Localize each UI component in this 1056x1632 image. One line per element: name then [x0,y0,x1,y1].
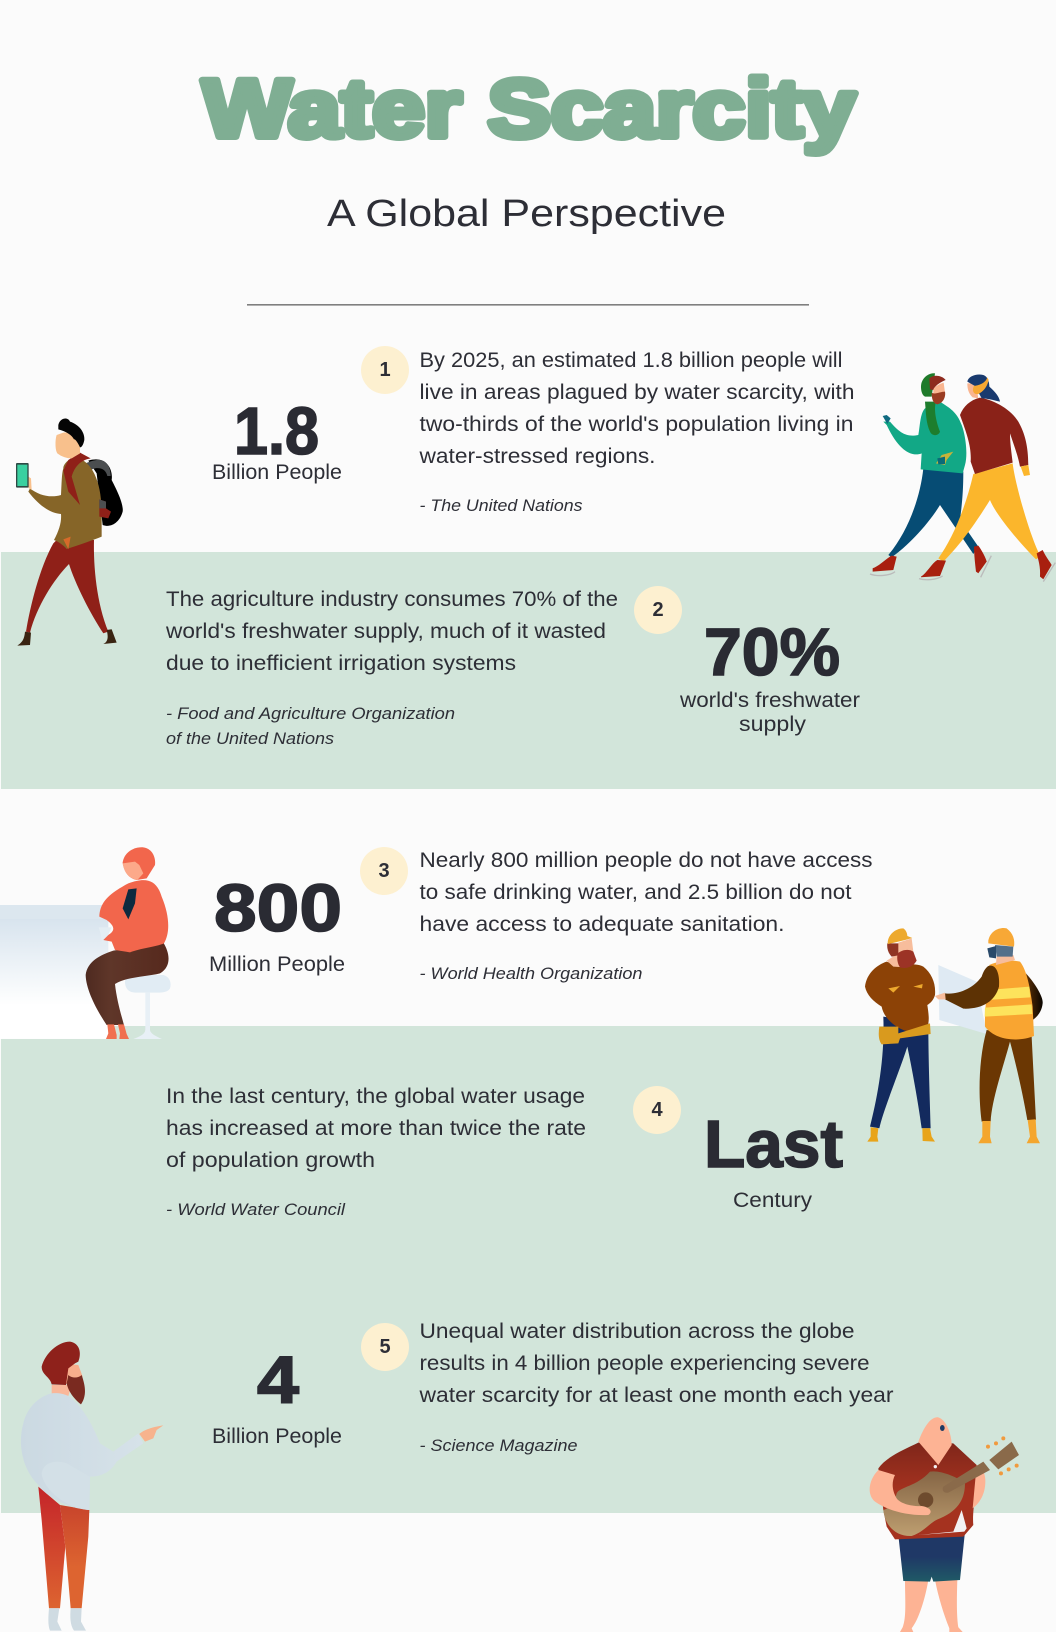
statistic label: Century [733,1189,813,1212]
illustration: couple ice skating [870,373,1055,582]
source: - World Water Council [166,1201,346,1219]
body text: The agriculture industry consumes 70% of the [166,588,618,611]
body text [166,1085,586,1172]
body text: due to inefficient irrigation systems [166,652,516,675]
body text: live in areas plagued by water scarcity, with [420,381,854,404]
body text: has increased at more than twice the rate [166,1117,586,1140]
statistic label: supply [739,713,807,736]
illustration: walker with backpack and phone [16,418,123,646]
panel: fact 1 [212,346,854,515]
person [86,847,169,1039]
number badge 2 [634,586,682,634]
statistic 4: 4 [257,1343,299,1418]
body text: results in 4 billion people experiencing severe [420,1352,870,1375]
statistic label: Billion People [212,461,342,484]
green band: items 4 and 5 [1,1026,1056,1513]
source: - Food and Agriculture Organization [166,705,455,723]
body text [418,349,854,468]
illustration: person seated at bar [0,847,171,1039]
subtitle: A Global Perspective [327,193,726,235]
green band: item 2 [1,552,1056,789]
statistic label: Billion People [212,1425,342,1448]
number badge 4: 4 [651,1099,663,1121]
worker with crossed arms [865,928,935,1142]
bar counter [0,905,108,1039]
panel: fact 3 [209,847,872,983]
source: - Science Magazine [420,1437,578,1455]
source: of the United Nations [166,730,334,748]
number badge 4 [633,1086,681,1134]
illustration: bearded man pointing [21,1342,163,1631]
title: Water Scarcity [202,64,856,154]
statistic label: Million People [209,953,345,976]
body text: have access to adequate sanitation. [420,913,784,936]
body text: of population growth [166,1149,375,1172]
body text [420,849,872,936]
source: - World Health Organization [420,965,642,983]
blueprint [938,965,987,1034]
body text: water scarcity for at least one month each year [418,1384,894,1407]
body text: Unequal water distribution across the globe [420,1320,854,1343]
statistic 70%: 70% [704,615,840,690]
body text: to safe drinking water, and 2.5 billion do not [420,881,852,904]
body text: Nearly 800 million people do not have access [420,849,872,872]
header divider [247,304,809,306]
number badge 5 [361,1323,409,1371]
body text: In the last century, the global water usage [166,1085,585,1108]
number badge 1 [361,346,409,394]
number badge 2: 2 [652,599,664,621]
source [166,705,455,748]
statistic Last: Last [704,1107,843,1182]
number badge 1: 1 [379,359,391,381]
illustration: two construction workers with plan [865,928,1043,1143]
number badge 5: 5 [379,1336,391,1358]
body text: By 2025, an estimated 1.8 billion people will [420,349,842,372]
statistic 1.8: 1.8 [234,394,319,469]
number badge 3 [360,847,408,895]
source: - The United Nations [420,497,582,515]
statistic 800: 800 [214,871,342,946]
body text: two-thirds of the world's population living in [420,413,854,436]
body text: world's freshwater supply, much of it wasted [165,620,606,643]
body text [418,1320,894,1407]
body text [165,588,618,675]
panel: fact 4 [166,1085,843,1219]
number badge 3: 3 [378,860,390,882]
panel: fact 2 [165,586,860,748]
worker in hi-vis vest [935,928,1043,1143]
illustration: man playing guitar [870,1417,1019,1632]
statistic label [679,689,860,736]
body text: water-stressed regions. [418,445,656,468]
stool [125,975,171,1039]
statistic label: world's freshwater [679,689,860,712]
panel: fact 5 [212,1320,894,1455]
